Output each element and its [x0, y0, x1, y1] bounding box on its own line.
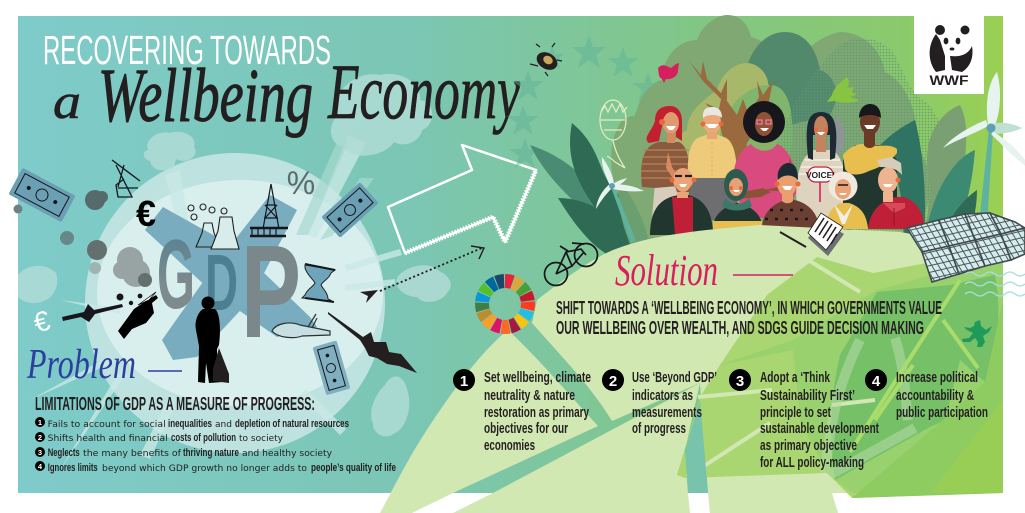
icon: solar panels: [907, 213, 1025, 282]
panel: problem illustration: [18, 74, 451, 470]
icon: factory flasks: [188, 204, 239, 249]
heading: solution: Solution: [615, 246, 718, 295]
icon: WWF panda logo: WWF: [930, 72, 969, 88]
solution item 2: Use ‘Beyond GDP’: [632, 369, 717, 386]
person: long black hair woman: [796, 112, 848, 218]
icon: bird: [658, 63, 679, 83]
GDP letter P: P: [241, 218, 301, 365]
leaf lower: [453, 383, 700, 513]
person: older man yellow: [687, 107, 739, 220]
icon: pen: [780, 232, 806, 247]
icon: bicycle: [544, 243, 598, 286]
limitation 1: 1: [38, 418, 42, 427]
icon: frog: [962, 320, 992, 347]
limitation 3: thriving nature: [183, 447, 239, 459]
panel: solution hill: [380, 225, 1003, 513]
globe: [30, 135, 402, 470]
GDP letter D: D: [205, 238, 238, 327]
solution item 2: indicators as: [632, 387, 693, 404]
solution item 3: sustainable development: [760, 420, 879, 437]
person: woman in hijab: [713, 169, 762, 229]
limitation 3: Neglects: [48, 447, 80, 459]
icon: WWF panda logo: [914, 16, 984, 94]
bright veins: [850, 280, 978, 452]
person: bald bearded man: [650, 168, 713, 235]
solution item 1: [453, 369, 591, 454]
solution item 3: 3: [736, 373, 744, 390]
icon: green bird: [827, 77, 859, 103]
icon: hourglass: [302, 264, 335, 302]
panel: left and right foliage: [530, 105, 977, 262]
panel: problem illustration: G: [157, 219, 195, 329]
limitation 3: [35, 447, 332, 459]
limitation 2: to society: [239, 434, 283, 444]
leaf left: [380, 330, 598, 513]
person: blond man red polo: [868, 157, 925, 229]
solution item 3: principle to set: [760, 404, 831, 421]
limitation 1: Fails to account for social: [48, 420, 166, 430]
icon: SDG colour wheel: [473, 272, 537, 336]
person: dark man yellow top: [843, 104, 897, 230]
icon: bee: [530, 43, 562, 76]
icon: small wind turbine: [596, 157, 644, 243]
translucent veins: [825, 338, 915, 475]
solution item 4: Increase political: [896, 369, 978, 386]
solution item 3: as primary objective: [760, 437, 857, 454]
small stones: [116, 294, 142, 305]
person: red hair woman: [641, 106, 691, 218]
icon: euro black: €: [136, 193, 156, 234]
tree green: [691, 85, 792, 195]
solution item 1: objectives for our: [484, 420, 568, 437]
waves: [965, 272, 1025, 296]
solution item 1: restoration as primary: [484, 404, 589, 421]
title: a: [53, 73, 81, 129]
limitation 1: inequalities: [168, 418, 212, 430]
icon: dotted arrow: [360, 246, 484, 303]
solution item 1: Set wellbeing, climate: [484, 369, 591, 386]
teal strip: [685, 400, 708, 493]
limitation 2: Shifts health and financial: [48, 434, 168, 444]
person: pink dress woman: [731, 101, 797, 218]
plant left of people: [611, 116, 657, 230]
green leaf mid: [720, 263, 1003, 493]
text block: solution statement: [556, 298, 942, 338]
icon: oil pump: [112, 160, 140, 197]
clouds: [18, 74, 451, 436]
blue brush cross: [145, 195, 317, 360]
icon: large wind turbine: [943, 72, 1025, 225]
icon: arrow: [388, 145, 536, 253]
solution item 2: 2: [609, 373, 617, 390]
icon: fallen pine tree: [328, 312, 417, 373]
limitation 3: 3: [38, 448, 42, 457]
icon: paper stack: [808, 213, 844, 256]
solution item 3: for ALL policy-making: [760, 454, 864, 471]
panel: forest background: [611, 15, 965, 242]
text block: limitations: LIMITATIONS OF GDP AS A MEASURE OF PROGRESS:: [35, 394, 315, 414]
person: man brown shirt: [762, 163, 819, 228]
icon: dead bird: [272, 314, 330, 338]
limitation 2: costs of pollution: [171, 432, 236, 444]
icon: bill left: [8, 168, 76, 222]
icon: small fallen tree: [62, 304, 123, 322]
sign: voice: VOICE!: [806, 170, 835, 180]
heading: problem: Problem: [26, 342, 136, 388]
icon: bill right: [321, 182, 379, 238]
icon: percent: %: [287, 165, 315, 201]
title: Economy: [327, 48, 520, 135]
tree dark: [725, 32, 836, 140]
solution item 1: 1: [460, 373, 468, 390]
green leaf dark: [831, 275, 998, 480]
icon: pointing hand: [118, 292, 158, 339]
limitation 2: 2: [38, 433, 42, 442]
sign: voice: [806, 167, 835, 202]
solution item 2: measurements: [632, 404, 702, 421]
icon: bill bottom: [313, 340, 350, 395]
solution item 4: 4: [872, 373, 881, 390]
green corner: [930, 400, 1003, 493]
limitation 3: and healthy society: [242, 449, 332, 459]
tree right sage: [745, 32, 930, 232]
tree sage: [626, 15, 791, 242]
limitation 2: [35, 432, 283, 444]
limitation 4: people’s quality of life: [311, 462, 396, 474]
tree halftone: [774, 38, 965, 240]
solution item 2: of progress: [632, 420, 686, 437]
solution item 4: accountability &: [896, 387, 974, 404]
limitation 4: Ignores limits: [48, 462, 98, 474]
solution item 1: neutrality & nature: [484, 387, 575, 404]
limitation 3: the many benefits of: [83, 449, 182, 459]
smoke blobs: [14, 190, 152, 287]
limitation 4: [35, 461, 396, 474]
text block: limitations: [35, 394, 396, 474]
title: RECOVERING TOWARDS: [43, 27, 331, 73]
icon: thistle flower: [600, 100, 627, 168]
solution item 1: economies: [484, 437, 535, 454]
person: older woman: [825, 172, 868, 229]
icon: euro white: €: [30, 304, 54, 339]
icon: silhouette with bag: [195, 296, 229, 383]
limitation 4: beyond which GDP growth no longer adds to: [102, 464, 307, 474]
solution item 2: [602, 369, 717, 437]
panel: people: [641, 101, 925, 235]
limitation 4: 4: [38, 462, 43, 471]
tree olive: [665, 63, 779, 207]
limitation 1: [35, 417, 349, 430]
limitation 1: depletion of natural resources: [235, 418, 349, 430]
solution item 3: [729, 369, 879, 471]
hill main: [532, 225, 1003, 513]
limitation 1: and: [215, 420, 232, 430]
stars: [507, 35, 664, 168]
deer: [689, 61, 773, 177]
green leaf bright: [677, 257, 1003, 498]
solution item 3: Sustainability First’: [760, 387, 855, 404]
light veins: [687, 255, 875, 477]
gray leaf: [827, 115, 845, 161]
title: [43, 27, 520, 138]
solution item 4: [865, 369, 988, 421]
icon: oil rig: [250, 184, 288, 236]
cloud stem: [296, 135, 374, 240]
title: Wellbeing: [98, 54, 313, 138]
green bottom right: [852, 300, 1003, 498]
solution item 3: Adopt a ‘Think: [760, 369, 830, 386]
